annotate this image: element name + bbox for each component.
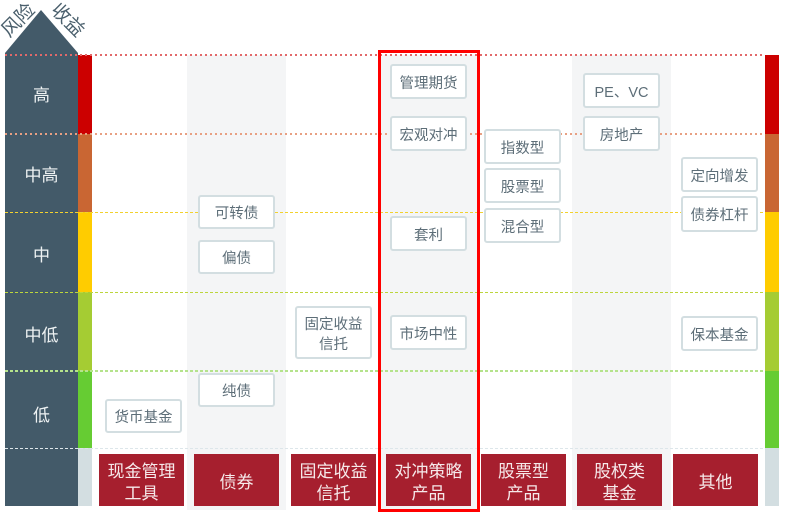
product: arbitrage: 套利 [414, 228, 443, 244]
category: other: 其他 [698, 472, 732, 492]
product: fixed income trust [295, 306, 372, 359]
right risk colour bar [765, 55, 779, 506]
product: money funds [105, 399, 182, 433]
product: market neutral: 市场中性 [400, 326, 458, 342]
category: hedge strategy products: 产品 [412, 484, 446, 502]
category: equity investment funds [577, 454, 662, 506]
product: real estate [583, 116, 660, 151]
category: bonds: 债券 [220, 472, 254, 492]
shaded column: hedge strategies [380, 55, 479, 510]
product: fixed income trust: 固定收益 [304, 316, 362, 332]
category: hedge strategy products [386, 454, 471, 506]
product: fixed income trust: 信托 [319, 336, 348, 352]
shaded column: bonds [187, 55, 286, 510]
axis label: low: 低 [33, 406, 50, 425]
category: equity products: 产品 [506, 484, 540, 502]
product: equity funds [484, 168, 561, 203]
category: cash management: 工具 [124, 484, 158, 502]
category: cash management: 现金管理 [108, 462, 176, 480]
category: equity products: 股票型 [498, 462, 549, 480]
product: private placement [681, 157, 758, 192]
category: equity products [481, 454, 566, 506]
product: convertible bonds: 可转债 [215, 206, 258, 222]
category: other [673, 454, 758, 506]
category: fixed income trust: 信托 [316, 484, 350, 502]
product: market neutral [390, 315, 467, 350]
category: equity investment funds: 基金 [602, 484, 636, 502]
axis label: high: 高 [33, 86, 50, 105]
product: hybrid funds [484, 208, 561, 243]
category: fixed income trust [291, 454, 376, 506]
axis label: medium-low: 中低 [24, 326, 58, 345]
product: private placement: 定向增发 [690, 168, 748, 184]
product: index funds: 指数型 [501, 140, 544, 156]
product: arbitrage [390, 216, 467, 251]
product: bond-biased: 偏债 [222, 251, 251, 267]
product: macro hedge: 宏观对冲 [400, 128, 458, 144]
product: PE and VC [583, 73, 660, 108]
product: equity funds: 股票型 [501, 180, 544, 196]
product: money funds: 货币基金 [114, 410, 172, 426]
product: convertible bonds [198, 195, 275, 229]
red highlight frame [378, 50, 480, 512]
category: equity investment funds: 股权类 [594, 462, 645, 480]
product: principal-protected funds: 保本基金 [690, 328, 748, 344]
risk level axis arrow [5, 10, 78, 506]
product: bond leverage: 债券杠杆 [690, 208, 748, 224]
product: bond leverage [681, 196, 758, 232]
product: real estate: 房地产 [600, 128, 643, 144]
category: cash management [99, 454, 184, 506]
product: pure bonds [198, 373, 275, 407]
product: bond-biased [198, 240, 275, 274]
product: hybrid funds: 混合型 [501, 220, 544, 236]
category: fixed income trust: 固定收益 [300, 462, 368, 480]
product: pure bonds: 纯债 [222, 384, 251, 400]
rotated label: return: 收益 [46, 0, 88, 42]
product: principal-protected funds [681, 316, 758, 351]
product: managed futures: 管理期货 [400, 76, 458, 92]
shaded column: equity funds [572, 55, 671, 510]
axis label: medium-high: 中高 [24, 166, 58, 185]
category: bonds [194, 454, 279, 506]
left risk colour bar [78, 55, 92, 506]
product: managed futures [390, 64, 467, 99]
category: hedge strategy products: 对冲策略 [394, 462, 462, 480]
axis label: medium: 中 [33, 246, 50, 265]
product: index funds [484, 129, 561, 164]
product: PE and VC: PE、VC [594, 84, 648, 100]
product: macro hedge [390, 116, 467, 151]
